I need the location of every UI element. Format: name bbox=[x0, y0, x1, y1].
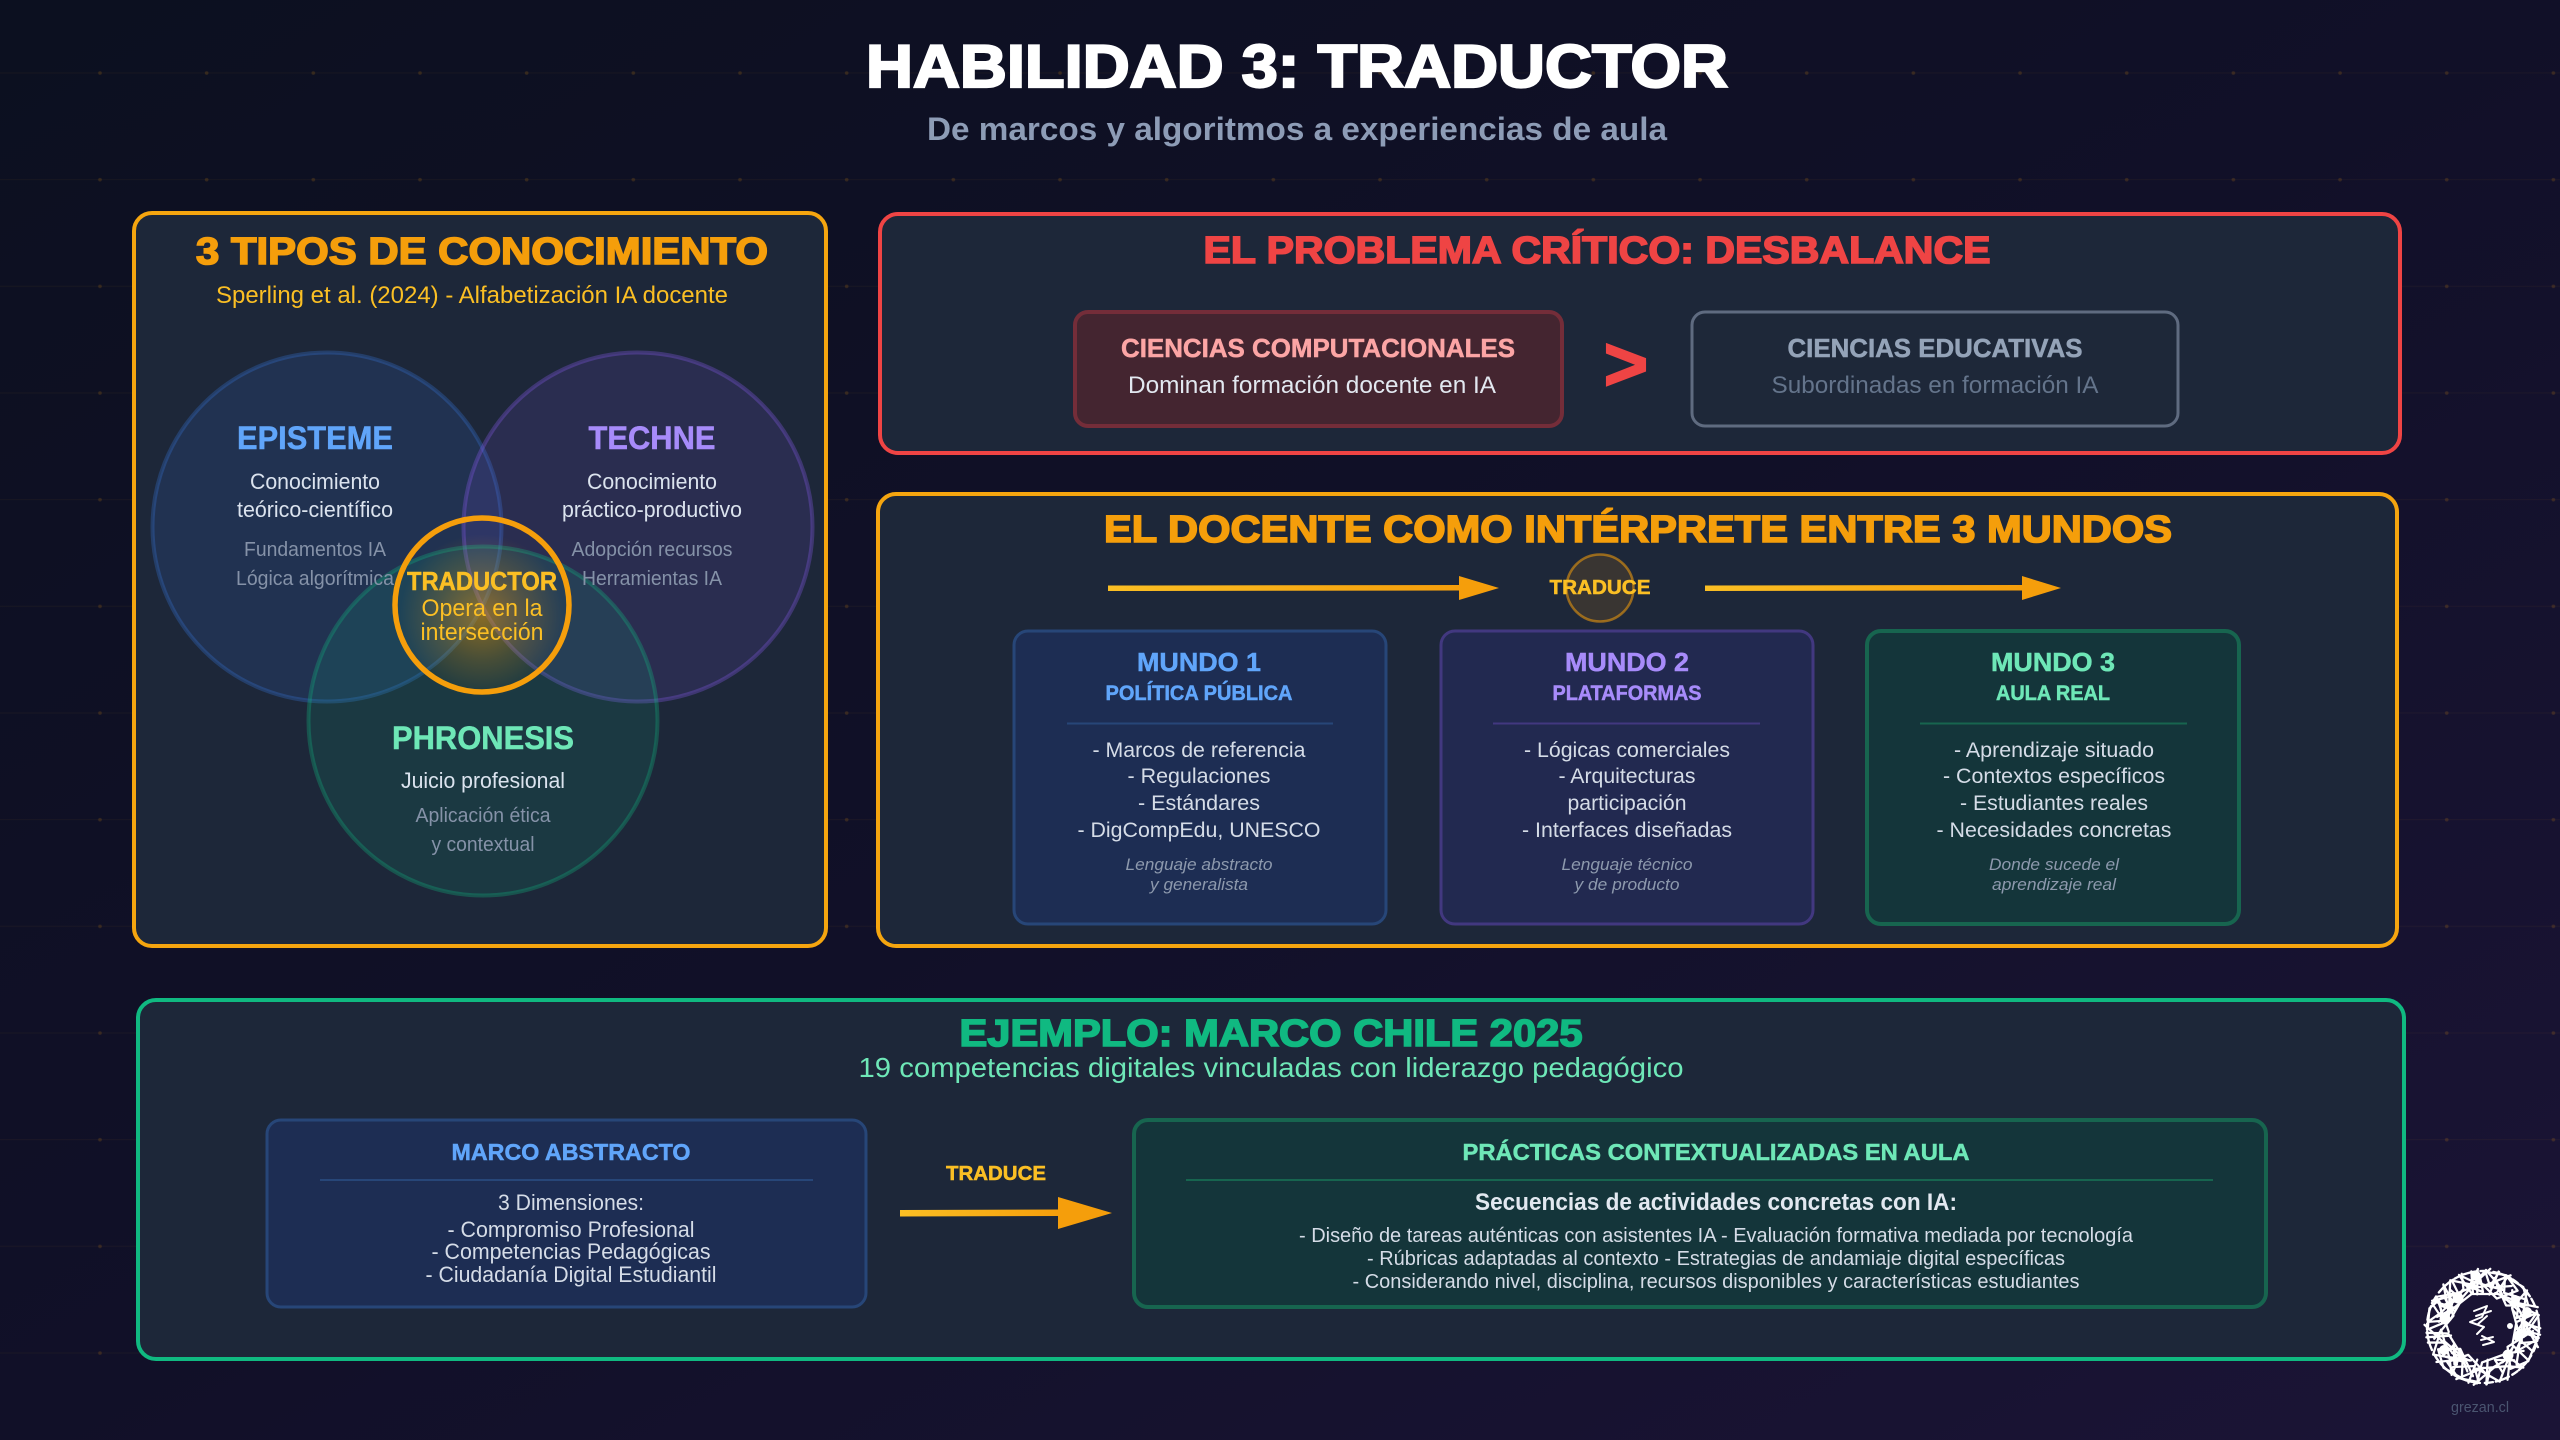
arrow: right bbox=[1705, 576, 2061, 600]
box: marco abstracto: 3 Dimensiones: bbox=[498, 1190, 644, 1215]
card: mundo 3: - Estudiantes reales bbox=[1960, 792, 2148, 815]
techne text: Adopción recursos bbox=[572, 539, 732, 561]
techne text: práctico-productivo bbox=[562, 497, 742, 522]
phronesis text: y contextual bbox=[432, 834, 534, 856]
techne text: TECHNE bbox=[588, 420, 716, 456]
card: mundo 2: Lenguaje técnico bbox=[1562, 855, 1692, 874]
card: mundo 1: Lenguaje abstracto bbox=[1126, 855, 1272, 874]
traductor label: TRADUCTOR bbox=[407, 566, 557, 596]
card: mundo 3: AULA REAL bbox=[1996, 682, 2110, 705]
card: mundo 1: MUNDO 1 bbox=[1137, 647, 1261, 677]
card: mundo 3: aprendizaje real bbox=[1992, 875, 2117, 894]
box: practicas contextualizadas bbox=[1134, 1120, 2266, 1307]
panel: 3 tipos de conocimiento bbox=[134, 213, 826, 946]
card: mundo 2: y de producto bbox=[1573, 875, 1680, 894]
box: ciencias computacionales: Dominan formación docente en IA bbox=[1128, 372, 1496, 399]
techne text: Conocimiento bbox=[587, 469, 717, 494]
box: ciencias educativas bbox=[1692, 312, 2178, 426]
episteme text bbox=[236, 420, 395, 590]
episteme text: Lógica algorítmica bbox=[236, 568, 395, 590]
translate arrow bbox=[900, 1163, 1112, 1229]
card: mundo 2 bbox=[1441, 631, 1813, 924]
traduce badge bbox=[1550, 554, 1650, 622]
card: mundo 1: POLÍTICA PÚBLICA bbox=[1106, 681, 1292, 705]
venn circle: phronesis bbox=[308, 546, 658, 896]
card: mundo 3 bbox=[1867, 631, 2239, 924]
box: practicas contextualizadas: - Diseño de tareas auténticas con asistentes IA - Evaluación formativa mediada por tecnología bbox=[1299, 1225, 2134, 1247]
panel: ejemplo marco chile bbox=[138, 1000, 2404, 1359]
problem heading: EL PROBLEMA CRÍTICO: DESBALANCE bbox=[1204, 228, 1990, 272]
card: mundo 2: MUNDO 2 bbox=[1565, 647, 1689, 677]
box: ciencias computacionales: CIENCIAS COMPUTACIONALES bbox=[1121, 333, 1515, 363]
venn circle: episteme bbox=[152, 352, 502, 702]
arrow: left bbox=[1108, 576, 1499, 600]
techne text: Herramientas IA bbox=[582, 568, 723, 590]
subtitle: De marcos y algoritmos a experiencias de aula bbox=[927, 111, 1667, 147]
card: mundo 2: - Interfaces diseñadas bbox=[1522, 819, 1732, 842]
card: mundo 2: participación bbox=[1568, 792, 1686, 815]
card: mundo 1: y generalista bbox=[1149, 875, 1248, 894]
episteme text: Conocimiento bbox=[250, 469, 380, 494]
translate arrow: TRADUCE bbox=[946, 1163, 1046, 1185]
card: mundo 2: - Arquitecturas bbox=[1558, 765, 1696, 788]
panel: el docente como interprete bbox=[878, 494, 2397, 946]
box: marco abstracto: - Ciudadanía Digital Estudiantil bbox=[426, 1262, 716, 1287]
box: practicas contextualizadas: - Considerando nivel, disciplina, recursos disponibles y características estudiantes bbox=[1352, 1271, 2080, 1293]
phronesis text: Aplicación ética bbox=[416, 805, 551, 827]
box: marco abstracto: - Compromiso Profesional bbox=[448, 1217, 694, 1242]
card: mundo 1: - Estándares bbox=[1138, 792, 1260, 815]
interprete heading: EL DOCENTE COMO INTÉRPRETE ENTRE 3 MUNDOS bbox=[1104, 507, 2172, 551]
box: practicas contextualizadas: Secuencias de actividades concretas con IA: bbox=[1475, 1189, 1957, 1216]
card: mundo 1: - Regulaciones bbox=[1128, 765, 1270, 788]
card: mundo 1 bbox=[1014, 631, 1386, 924]
card: mundo 2: PLATAFORMAS bbox=[1552, 682, 1702, 705]
traductor circle: Opera en la bbox=[422, 595, 543, 622]
ejemplo heading: EJEMPLO: MARCO CHILE 2025 bbox=[960, 1013, 1582, 1055]
traduce badge: TRADUCE bbox=[1550, 577, 1650, 599]
card: mundo 2: - Lógicas comerciales bbox=[1524, 739, 1730, 762]
box: marco abstracto: MARCO ABSTRACTO bbox=[452, 1139, 690, 1165]
card: mundo 3: MUNDO 3 bbox=[1991, 647, 2115, 677]
phronesis text: PHRONESIS bbox=[392, 720, 574, 756]
episteme text: Fundamentos IA bbox=[244, 539, 387, 561]
panel citation: Sperling et al. (2024) - Alfabetización IA docente bbox=[216, 282, 728, 309]
venn circle: techne bbox=[464, 352, 812, 702]
box: ciencias computacionales bbox=[1075, 312, 1562, 426]
logo: network ring bbox=[2421, 1265, 2545, 1390]
techne text bbox=[562, 420, 742, 590]
phronesis text: Juicio profesional bbox=[401, 768, 565, 793]
episteme text: teórico-científico bbox=[237, 497, 393, 522]
logo caption: grezan.cl bbox=[2451, 1399, 2509, 1416]
card: mundo 3: - Contextos específicos bbox=[1943, 765, 2165, 788]
phronesis text bbox=[392, 720, 574, 856]
episteme text: EPISTEME bbox=[237, 420, 393, 456]
card: mundo 1: - DigCompEdu, UNESCO bbox=[1078, 819, 1320, 842]
panel: el problema critico bbox=[880, 214, 2400, 453]
title: HABILIDAD 3: TRADUCTOR bbox=[866, 33, 1728, 100]
traductor circle bbox=[395, 518, 569, 698]
card: mundo 1: - Marcos de referencia bbox=[1092, 739, 1306, 762]
greater than sign: > bbox=[1604, 322, 1648, 407]
box: ciencias educativas: Subordinadas en formación IA bbox=[1772, 372, 2098, 399]
box: ciencias educativas: CIENCIAS EDUCATIVAS bbox=[1788, 333, 2082, 363]
card: mundo 3: - Necesidades concretas bbox=[1936, 819, 2172, 842]
box: practicas contextualizadas: PRÁCTICAS CONTEXTUALIZADAS EN AULA bbox=[1462, 1138, 1970, 1165]
box: marco abstracto: - Competencias Pedagógicas bbox=[432, 1239, 710, 1264]
panel heading: 3 TIPOS DE CONOCIMIENTO bbox=[196, 231, 768, 273]
box: marco abstracto bbox=[267, 1120, 866, 1307]
box: practicas contextualizadas: - Rúbricas adaptadas al contexto - Estrategias de andamiaje digital específicas bbox=[1367, 1248, 2065, 1270]
card: mundo 3: Donde sucede el bbox=[1989, 855, 2120, 874]
ejemplo subtitle: 19 competencias digitales vinculadas con liderazgo pedagógico bbox=[858, 1052, 1684, 1083]
card: mundo 3: - Aprendizaje situado bbox=[1954, 739, 2154, 762]
traductor circle: intersección bbox=[420, 619, 544, 646]
